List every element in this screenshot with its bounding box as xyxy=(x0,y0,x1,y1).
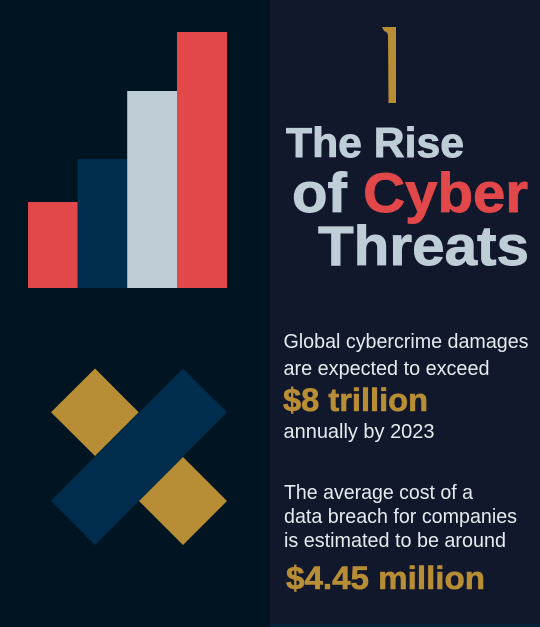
bar chart xyxy=(28,32,227,288)
title xyxy=(286,119,529,277)
text block: data breach cost: is estimated to be around xyxy=(284,530,506,552)
title: The Rise xyxy=(286,119,464,166)
text block: cybercrime damages: annually by 2023 xyxy=(284,421,434,443)
bottom edge strip xyxy=(270,624,540,627)
text block: cybercrime damages: Global cybercrime damages xyxy=(284,331,528,353)
text block: data breach cost: data breach for companies xyxy=(284,506,517,528)
text block: data breach cost xyxy=(284,482,517,596)
left background panel xyxy=(0,0,270,627)
text block: cybercrime damages xyxy=(283,331,528,443)
text block: cybercrime damages: are expected to exceed xyxy=(284,358,490,380)
icon: crossed diamonds xyxy=(51,368,227,545)
text block: cybercrime damages: $8 trillion xyxy=(283,382,428,418)
right background panel xyxy=(270,0,540,627)
title: Threats xyxy=(318,214,529,277)
text block: data breach cost: The average cost of a xyxy=(284,482,474,504)
title: of Cyber xyxy=(292,161,528,224)
text block: data breach cost: $4.45 million xyxy=(286,560,485,596)
section numeral 1 xyxy=(382,27,396,103)
